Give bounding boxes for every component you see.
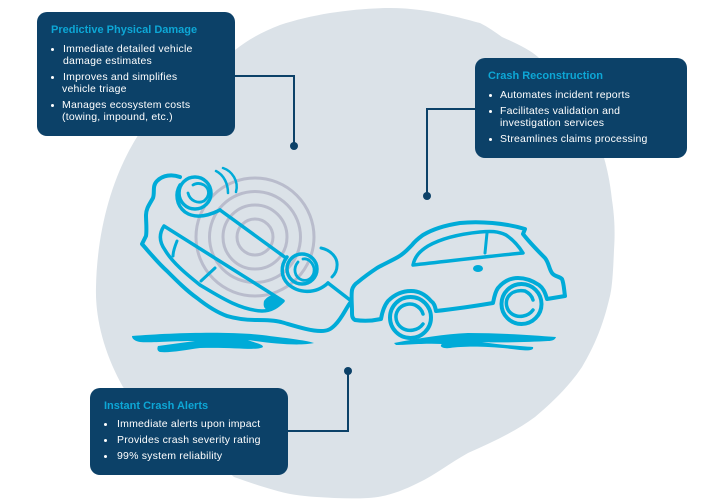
impact rings bbox=[196, 178, 314, 296]
front wheel bbox=[390, 297, 431, 338]
bullet list: Improves and simplifies bbox=[63, 71, 177, 83]
bullet list: investigation services bbox=[500, 117, 604, 129]
connector: instant crash alerts bbox=[288, 367, 352, 431]
skid mark: left car bbox=[132, 333, 314, 352]
bullet list: damage estimates bbox=[63, 55, 152, 67]
heading: Instant Crash Alerts bbox=[104, 400, 208, 412]
bullet list bbox=[489, 89, 648, 145]
front wheel bbox=[177, 168, 237, 216]
crashed car upright bbox=[352, 222, 565, 338]
connector: crash reconstruction bbox=[423, 109, 475, 200]
panel: crash reconstruction bbox=[475, 58, 687, 158]
heading: Crash Reconstruction bbox=[488, 70, 603, 82]
bullet list bbox=[104, 418, 261, 462]
heading: Predictive Physical Damage bbox=[51, 24, 197, 36]
bullet list: vehicle triage bbox=[62, 83, 127, 95]
bullet list: Automates incident reports bbox=[500, 89, 630, 101]
bullet list bbox=[51, 43, 193, 123]
bullet list: Provides crash severity rating bbox=[117, 434, 261, 446]
rear wheel bbox=[502, 284, 542, 324]
bullet list: (towing, impound, etc.) bbox=[62, 111, 173, 123]
overturned car bbox=[142, 168, 350, 331]
bullet list: Facilitates validation and bbox=[500, 105, 620, 117]
skid mark: right car bbox=[394, 333, 556, 350]
connector: predictive physical damage bbox=[235, 76, 298, 150]
background blob bbox=[96, 8, 615, 498]
bullet list: 99% system reliability bbox=[117, 450, 222, 462]
bullet list: Manages ecosystem costs bbox=[62, 99, 190, 111]
panel: predictive physical damage bbox=[37, 12, 235, 136]
bullet list: Immediate alerts upon impact bbox=[117, 418, 260, 430]
rear wheel bbox=[282, 248, 337, 291]
bullet list: Immediate detailed vehicle bbox=[63, 43, 193, 55]
panel: instant crash alerts bbox=[90, 388, 288, 475]
bullet list: Streamlines claims processing bbox=[500, 133, 648, 145]
